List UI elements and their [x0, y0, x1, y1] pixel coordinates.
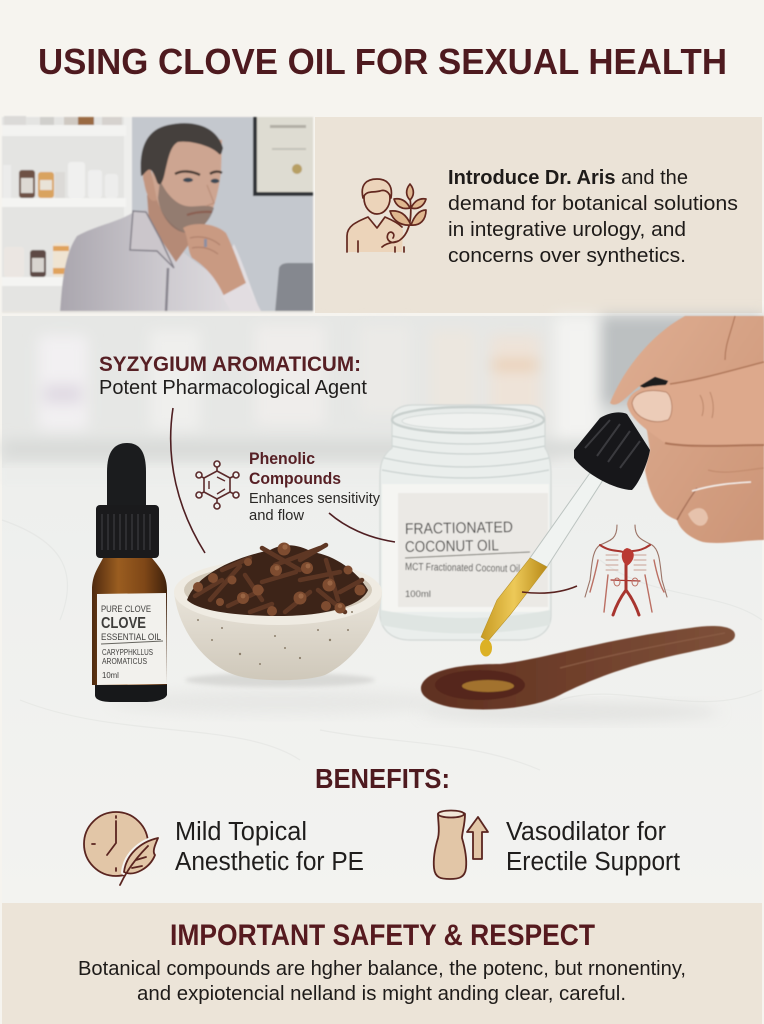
heading: syzygium aromaticum: SYZYGIUM AROMATICUM: — [99, 353, 361, 376]
pointer: dropper to anatomy — [522, 586, 577, 593]
blurred pharmacy background — [2, 316, 764, 484]
dropper with oil — [480, 412, 650, 656]
icon: vessel and arrow — [434, 810, 488, 879]
amber clove bottle: ESSENTIAL OIL — [101, 632, 161, 643]
amber clove bottle — [92, 443, 167, 702]
wooden spoon — [421, 626, 735, 709]
icon: clock and feather — [84, 812, 158, 885]
hand on chin — [183, 224, 246, 296]
benefit label: Vasodilator for — [506, 818, 666, 846]
icon: circulatory anatomy — [585, 525, 667, 615]
bowl of cloves — [174, 542, 382, 687]
amber clove bottle: 10ml — [102, 671, 119, 680]
safety heading: IMPORTANT SAFETY & RESPECT — [170, 919, 595, 952]
intro text: Introduce Dr. Aris and the — [448, 167, 688, 189]
benefit label: Erectile Support — [506, 848, 680, 876]
safety body text — [78, 958, 686, 1005]
marble veins — [2, 520, 762, 770]
benefit: vasodilator — [434, 810, 680, 879]
callout: phenolic compounds: Enhances sensitivity — [249, 490, 380, 507]
callout: phenolic compounds — [249, 450, 380, 524]
pointer: to cloves — [171, 408, 205, 553]
coconut oil jar — [380, 405, 551, 640]
hand: thumb on bulb — [627, 362, 764, 446]
coconut oil jar: 100ml — [405, 589, 431, 600]
panel: intro — [315, 117, 762, 313]
intro text — [448, 167, 738, 267]
intro text: demand for botanical solutions — [448, 193, 738, 215]
coconut oil jar: COCONUT OIL — [405, 537, 499, 556]
icon: phenolic molecule — [196, 461, 239, 509]
hand: palm and fingers — [610, 316, 764, 543]
coconut oil jar: MCT Fractionated Coconut Oil — [405, 561, 520, 575]
coconut oil jar: FRACTIONATED — [405, 519, 513, 538]
intro text: concerns over synthetics. — [448, 245, 686, 267]
safety body text: Botanical compounds are hgher balance, the potenc, but rnonentiny, — [78, 958, 686, 980]
benefits heading: BENEFITS: — [315, 763, 450, 794]
heading: syzygium aromaticum: Potent Pharmacological Agent — [99, 376, 367, 399]
benefit label — [506, 818, 680, 876]
benefit label: Mild Topical — [175, 818, 307, 846]
safety body text: and expiotencial nelland is might anding clear, careful. — [137, 983, 626, 1005]
pointer: to jar — [329, 513, 395, 542]
icon: doctor with plant — [347, 179, 426, 252]
title: USING CLOVE OIL FOR SEXUAL HEALTH — [38, 41, 727, 82]
benefit label — [175, 818, 364, 876]
amber clove bottle: CARYPPHKLLUS — [102, 648, 153, 657]
amber clove bottle: PURE CLOVE — [101, 604, 151, 615]
benefit label: Anesthetic for PE — [175, 848, 364, 876]
shirt — [60, 208, 261, 313]
amber clove bottle: CLOVE — [101, 615, 146, 632]
callout: phenolic compounds: Compounds — [249, 470, 341, 488]
intro text: in integrative urology, and — [448, 219, 686, 241]
callout: phenolic compounds: Phenolic — [249, 450, 315, 468]
panel: product scene — [2, 316, 764, 903]
head — [152, 132, 222, 233]
panel: safety note — [2, 903, 762, 1024]
heading: syzygium aromaticum — [99, 353, 367, 399]
photo: doctor in office — [2, 116, 313, 313]
amber clove bottle: AROMATICUS — [102, 657, 147, 666]
callout: phenolic compounds: and flow — [249, 507, 304, 524]
benefit: anesthetic — [84, 812, 364, 885]
